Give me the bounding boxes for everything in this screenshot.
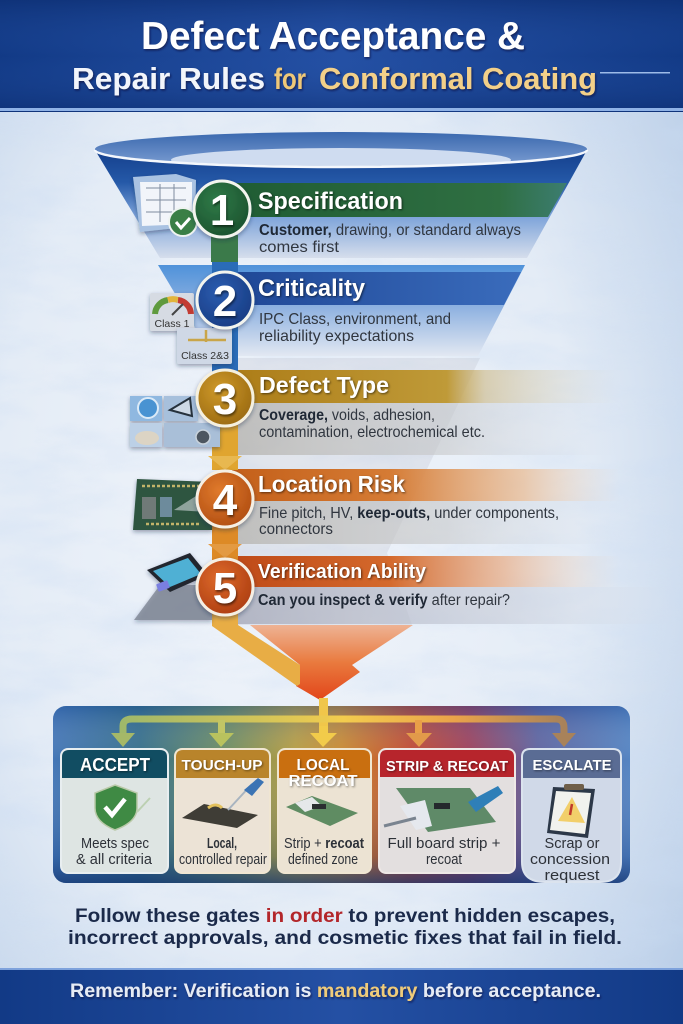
- step 2 text: Criticality: [258, 275, 366, 302]
- icon: board with brush: [182, 778, 264, 828]
- funnel body band 1: [95, 150, 587, 258]
- icon: shield: [95, 785, 150, 830]
- card: accept: Meets spec: [81, 835, 149, 852]
- step 2 criticality bands: [232, 272, 521, 305]
- card: escalate: Scrap or: [544, 835, 600, 852]
- icon: check badge: [169, 208, 197, 236]
- step 1 number badge: 1: [210, 186, 234, 235]
- step 1 text: comes first: [259, 239, 340, 256]
- step 2 number badge: 2: [213, 277, 237, 326]
- card: touch-up: Local,: [207, 835, 237, 852]
- title: Conformal Coating: [319, 61, 597, 96]
- icon: class 2 and 3 scale: [177, 328, 232, 364]
- card: local recoat: [278, 749, 371, 873]
- title: for: [274, 63, 306, 96]
- icon: defect type tiles: [130, 396, 220, 447]
- card: escalate: ESCALATE: [532, 757, 612, 774]
- step 3 text: Defect Type: [259, 372, 389, 398]
- step 4 text: Fine pitch, HV, keep-outs, under components,: [259, 505, 559, 522]
- title: Repair Rules: [72, 61, 265, 96]
- icon: specification documents: [133, 174, 196, 232]
- panel background: [53, 706, 630, 883]
- icon: class 1 gauge: [150, 293, 194, 331]
- step circles: [194, 181, 253, 615]
- step 5 number badge: [197, 559, 253, 615]
- card: escalate: [522, 749, 621, 884]
- header band: [0, 0, 683, 112]
- step 3 number badge: [197, 370, 253, 426]
- funnel rim: [95, 132, 587, 172]
- card: touch-up: TOUCH-UP: [182, 757, 262, 774]
- card: strip and recoat: Full board strip +: [388, 835, 501, 852]
- card: strip and recoat: [379, 749, 515, 873]
- step 3 text: [259, 372, 485, 441]
- funnel lower ghost: [232, 358, 480, 625]
- closing statement: incorrect approvals, and cosmetic fixes that fail in field.: [68, 928, 622, 949]
- step 4 text: connectors: [259, 521, 333, 538]
- card: accept: ACCEPT: [80, 755, 150, 775]
- title: [72, 15, 597, 96]
- step 1 text: Specification: [258, 188, 403, 215]
- step 4 location risk bands: [232, 469, 620, 544]
- step 1 text: Customer, drawing, or standard always: [259, 222, 521, 239]
- step 1 number badge: [194, 181, 250, 237]
- card: accept: [61, 749, 168, 873]
- card: strip and recoat: recoat: [426, 851, 463, 868]
- footer band: [0, 968, 683, 1024]
- card: escalate: request: [544, 867, 600, 884]
- card: escalate: concession: [530, 851, 610, 868]
- branching arrows: [111, 698, 576, 747]
- step 2 text: [258, 275, 451, 345]
- icon: full board strip: [384, 786, 503, 832]
- step 4 text: Location Risk: [258, 471, 405, 497]
- step 1 specification bands: [226, 183, 567, 217]
- funnel: [95, 132, 587, 625]
- step 5 number badge: 5: [213, 564, 237, 613]
- closing statement: [68, 906, 622, 949]
- step 5 verification bands: [232, 556, 680, 624]
- card: local recoat: Strip + recoat: [284, 835, 364, 852]
- step 2 text: IPC Class, environment, and: [259, 311, 451, 328]
- card: local recoat: LOCAL: [296, 757, 350, 774]
- card: touch-up: [175, 749, 270, 873]
- footer reminder: Remember: Verification is mandatory before acceptance.: [70, 981, 601, 1002]
- step 3 text: Coverage, voids, adhesion,: [259, 407, 435, 424]
- card: local recoat: defined zone: [288, 851, 358, 868]
- icon: clipboard warning: [547, 784, 595, 838]
- funnel tip arrow: [250, 625, 413, 700]
- icon: tablet inspection: [134, 553, 212, 620]
- card: local recoat: RECOAT: [288, 773, 358, 790]
- step 5 text: Can you inspect & verify after repair?: [258, 592, 510, 609]
- decision panel: [53, 698, 630, 884]
- step 2 text: reliability expectations: [259, 328, 414, 345]
- step 2 number badge: [197, 272, 253, 328]
- central flow stem: [208, 235, 300, 686]
- step 4 number badge: 4: [213, 476, 238, 525]
- card: accept: & all criteria: [76, 851, 153, 868]
- step 3 defect type bands: [232, 370, 620, 455]
- icon: board local zone: [286, 796, 358, 826]
- icon: class 1 gauge: Class 1: [154, 318, 190, 330]
- closing statement: Follow these gates in order to prevent hidden escapes,: [75, 906, 615, 927]
- card: strip and recoat: STRIP & RECOAT: [386, 758, 508, 775]
- step 5 text: [258, 561, 510, 609]
- step 3 text: contamination, electrochemical etc.: [259, 424, 485, 441]
- step 1 text: [258, 188, 521, 256]
- title: Defect Acceptance &: [141, 15, 525, 58]
- step 3 number badge: 3: [213, 375, 237, 424]
- step 5 text: Verification Ability: [258, 561, 427, 583]
- step 4 text: [258, 471, 559, 538]
- icon: circuit board: [133, 479, 212, 530]
- funnel body band 2: [158, 265, 525, 356]
- icon: class 2 and 3 scale: Class 2&3: [181, 350, 229, 362]
- step 4 number badge: [197, 471, 253, 527]
- card: touch-up: controlled repair: [179, 851, 267, 868]
